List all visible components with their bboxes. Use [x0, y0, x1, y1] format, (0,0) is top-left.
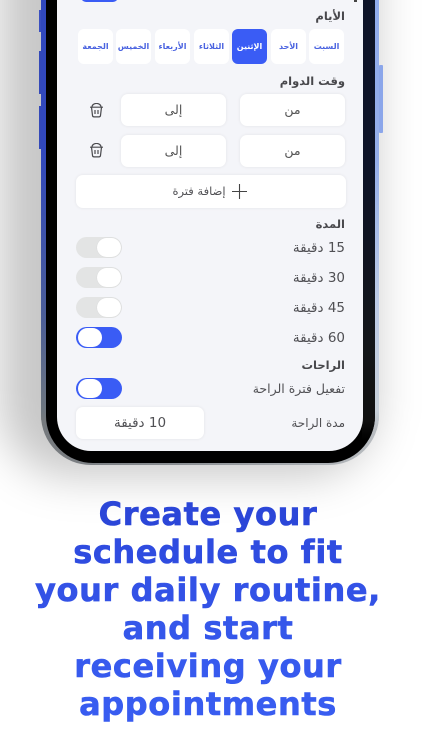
- label 15: 15 دقيقة: [293, 240, 345, 256]
- headline: your daily routine,: [35, 571, 381, 609]
- toggle 30: [76, 267, 122, 288]
- headline: Create your: [99, 495, 317, 533]
- toggle 15: [76, 237, 122, 258]
- headline: and start: [123, 609, 293, 647]
- toggle 60: [76, 327, 122, 348]
- day selector: الإثنين: [237, 42, 262, 51]
- headline: receiving your: [74, 647, 342, 685]
- day selector: الثلاثاء: [199, 42, 224, 51]
- heading: duration: المدة: [316, 217, 345, 231]
- phone screen: [57, 0, 363, 451]
- break duration field: [76, 407, 204, 439]
- label 30: 30 دقيقة: [293, 270, 345, 286]
- black bezel: [46, 0, 375, 463]
- icon: trash 1: [90, 103, 103, 118]
- phone frame: [41, 0, 379, 465]
- day selector: الخميس: [118, 42, 149, 51]
- day selector: الأحد: [279, 42, 298, 51]
- day selector: الجمعة: [82, 42, 109, 51]
- right frame tint: [373, 0, 379, 430]
- time row 1 to: [121, 94, 226, 126]
- phone side buttons: [39, 10, 383, 149]
- heading: breaks: الراحات: [301, 358, 345, 372]
- headline: schedule to fit: [73, 533, 343, 571]
- icon: trash 2: [90, 143, 103, 158]
- top dot: [354, 0, 357, 2]
- time row 2 from: من: [284, 143, 301, 158]
- day selector: الأربعاء: [159, 42, 186, 51]
- bezel right tint: [362, 0, 375, 440]
- label enable break: تفعيل فترة الراحة: [253, 381, 345, 396]
- toggle break: [76, 378, 122, 399]
- headline: appointments: [79, 685, 337, 723]
- time row 1 from: [240, 94, 345, 126]
- time row 2 to: إلى: [165, 143, 182, 158]
- time row 2 to: [121, 135, 226, 167]
- label 60: 60 دقيقة: [293, 330, 345, 346]
- break duration field: 10 دقيقة: [114, 415, 166, 431]
- heading: days: الأيام: [315, 9, 345, 23]
- left frame tint: [41, 0, 47, 420]
- time row 1 from: من: [284, 102, 301, 117]
- time row 2 from: [240, 135, 345, 167]
- button label: إضافة فترة: [172, 184, 226, 198]
- icon: plus: [232, 184, 247, 199]
- top toggle remnant: [81, 0, 118, 2]
- time row 1 to: إلى: [165, 102, 182, 117]
- phone shadow: [0, 0, 375, 476]
- add period button: [76, 175, 346, 208]
- day selector: السبت: [314, 42, 339, 51]
- headline: [35, 495, 381, 723]
- toggle 45: [76, 297, 122, 318]
- label break duration: مدة الراحة: [291, 416, 345, 430]
- day selector: [78, 29, 344, 64]
- label 45: 45 دقيقة: [293, 300, 345, 316]
- heading: working hours: وقت الدوام: [280, 74, 345, 88]
